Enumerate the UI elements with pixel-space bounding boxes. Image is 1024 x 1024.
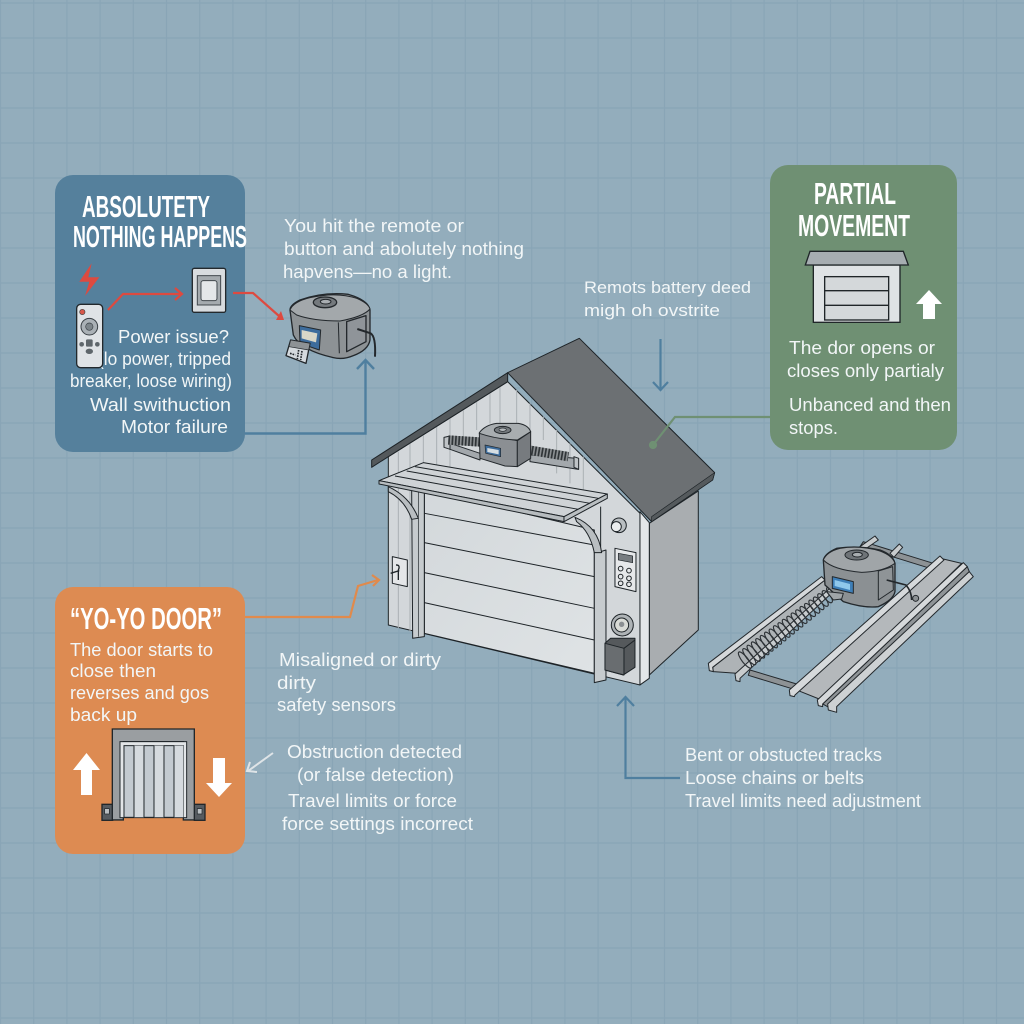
panel: absolutely nothing happens (55, 175, 247, 452)
illustration: garage building (372, 338, 715, 685)
text block: yo-yo description: close then (70, 661, 156, 681)
text block: partial movement detail: stops. (789, 418, 838, 438)
icon: up arrow (73, 753, 100, 795)
heading: absolutely nothing happens: ABSOLUTETY (82, 189, 210, 224)
text block: causes: Power issue? (118, 327, 229, 347)
text block: remote battery (584, 278, 751, 320)
text block: sensors: Misaligned or dirty (279, 650, 441, 670)
arrow: switch to motor (233, 293, 284, 320)
text block: description of no response: button and abolutely nothing (284, 239, 524, 259)
text block: sensors (277, 650, 441, 715)
arrow: remote to switch (108, 288, 182, 310)
heading: absolutely nothing happens (73, 189, 247, 254)
text block: causes: breaker, loose wiring) (70, 371, 232, 391)
text block: remote battery: Remots battery deed (584, 278, 751, 297)
text block: tracks: Travel limits need adjustment (685, 791, 921, 811)
opener mounted on gable (444, 423, 579, 469)
text block: yo-yo description: back up (70, 705, 137, 725)
text block: sensors: safety sensors (277, 695, 396, 715)
text block: obstruction: force settings incorrect (282, 814, 473, 834)
text block: yo-yo description: The door starts to (70, 640, 213, 660)
text block: tracks: Loose chains or belts (685, 768, 864, 788)
text block: tracks: Bent or obstucted tracks (685, 745, 882, 765)
heading: yo-yo door: “YO-YO DOOR” (70, 601, 222, 636)
text block: description of no response: You hit the remote or (284, 216, 464, 236)
text block: causes: Motor failure (121, 417, 228, 437)
text block: obstruction (282, 742, 473, 834)
icon: partly open garage (805, 251, 908, 322)
text block: obstruction: Obstruction detected (287, 742, 462, 762)
connector: green leader to roof (650, 417, 770, 448)
icon: wall switch (192, 268, 226, 312)
panel: yo-yo door (55, 587, 245, 854)
text block: partial movement detail: The dor opens or (789, 338, 935, 358)
text block: causes: Wall swithuction (90, 395, 231, 415)
text block: partial movement detail: closes only partialy (787, 361, 944, 381)
heading: partial movement: PARTIAL (814, 176, 896, 211)
text block: partial movement detail (787, 338, 951, 438)
text block: causes (70, 327, 232, 437)
panel: partial movement (770, 165, 957, 450)
text block: remote battery: migh oh ovstrite (584, 301, 720, 320)
icon: remote control (77, 304, 103, 368)
text block: partial movement detail: Unbanced and then (789, 395, 951, 415)
text block: yo-yo description (70, 640, 213, 725)
text block: description of no response: hapvens—no a light. (283, 262, 452, 282)
text block: obstruction: (or false detection) (297, 765, 454, 785)
arrow: yo-yo panel to wall switch (245, 575, 379, 617)
arrow: panel to motor (245, 360, 374, 434)
text block: obstruction: Travel limits or force (288, 791, 457, 811)
text block: tracks (685, 745, 921, 811)
heading: partial movement: MOVEMENT (798, 208, 910, 243)
arrow: obstruction note to panel (247, 753, 273, 772)
icon: down arrow (206, 758, 232, 797)
illustration: opener on tracks (708, 536, 973, 712)
text block: yo-yo description: reverses and gos (70, 683, 209, 703)
arrow: tracks note to garage (617, 697, 680, 778)
heading: absolutely nothing happens: NOTHING HAPPENS (73, 219, 247, 254)
text block: description of no response (283, 216, 524, 282)
heading: partial movement (798, 176, 910, 243)
icon: opener motor (286, 294, 375, 363)
text block: sensors: dirty (277, 673, 316, 693)
text block: causes: (lo power, tripped (98, 349, 231, 369)
icon: red lightning bolt (79, 263, 99, 296)
arrow: battery note to roof (653, 339, 668, 390)
icon: door frame (102, 729, 205, 820)
icon: up arrow (916, 290, 942, 319)
